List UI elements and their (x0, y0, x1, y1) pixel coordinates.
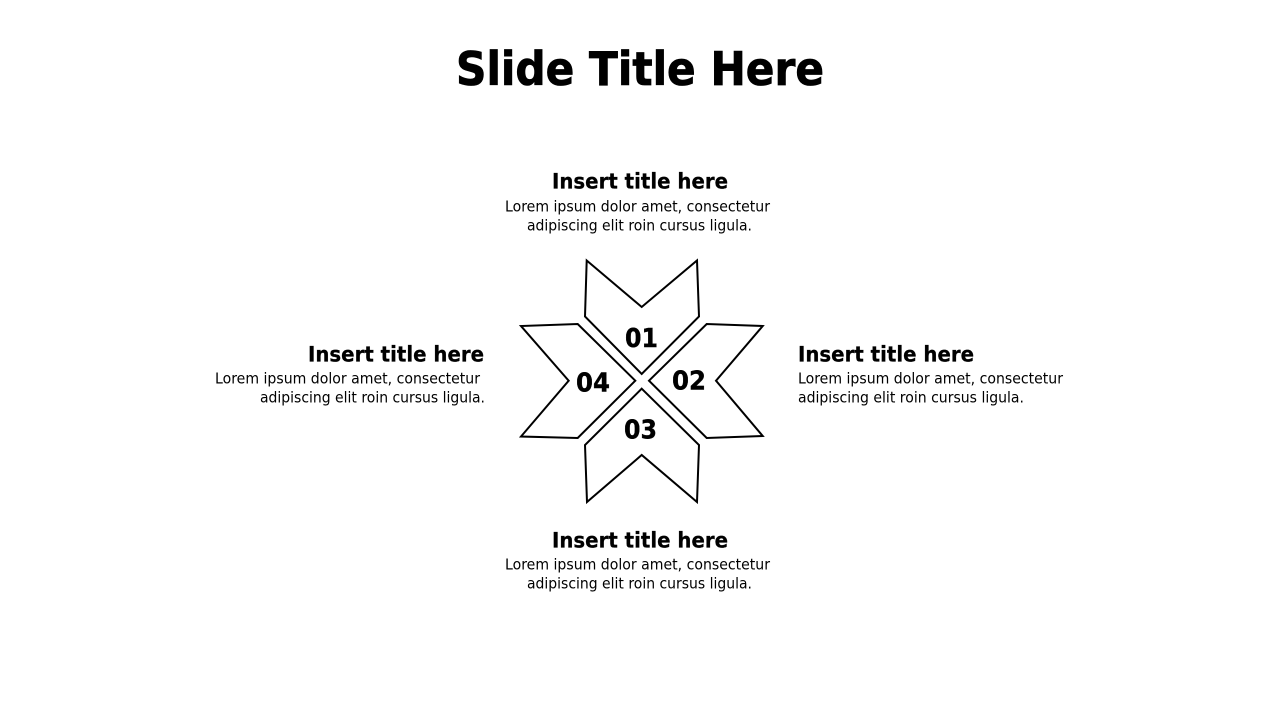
segment 04: 04 (576, 368, 610, 398)
segment 03 (585, 389, 699, 502)
body: right item: adipiscing elit roin cursus ligula. (798, 388, 1024, 406)
star diagram (521, 260, 763, 502)
body: bottom item: adipiscing elit roin cursus ligula. (527, 574, 752, 592)
segment 01: 01 (625, 324, 658, 354)
heading: right item: Insert title here (798, 342, 974, 366)
title: Slide Title Here (456, 42, 824, 96)
segment 02: 02 (672, 366, 706, 396)
body: bottom item: Lorem ipsum dolor amet, consectetur (505, 556, 771, 574)
segment 04 (521, 324, 635, 438)
body: left item: Lorem ipsum dolor amet, consectetur (215, 370, 481, 388)
body: left item (215, 370, 485, 406)
text block: bottom item (505, 528, 771, 592)
heading: top item: Insert title here (552, 170, 728, 194)
body: top item: Lorem ipsum dolor amet, consectetur (505, 198, 771, 216)
text block: top item (505, 170, 771, 234)
body: right item: Lorem ipsum dolor amet, consectetur (798, 370, 1064, 388)
text block: right item (798, 342, 1064, 406)
body: left item: adipiscing elit roin cursus ligula. (260, 388, 485, 406)
heading: left item: Insert title here (308, 342, 484, 366)
body: right item (798, 370, 1064, 406)
segment 03: 03 (624, 416, 657, 446)
segment 02 (649, 324, 763, 438)
text block: left item (215, 342, 485, 406)
segment 01 (585, 260, 699, 374)
heading: bottom item: Insert title here (552, 528, 728, 552)
body: top item: adipiscing elit roin cursus ligula. (527, 216, 752, 234)
body: top item (505, 198, 771, 234)
body: bottom item (505, 556, 771, 592)
